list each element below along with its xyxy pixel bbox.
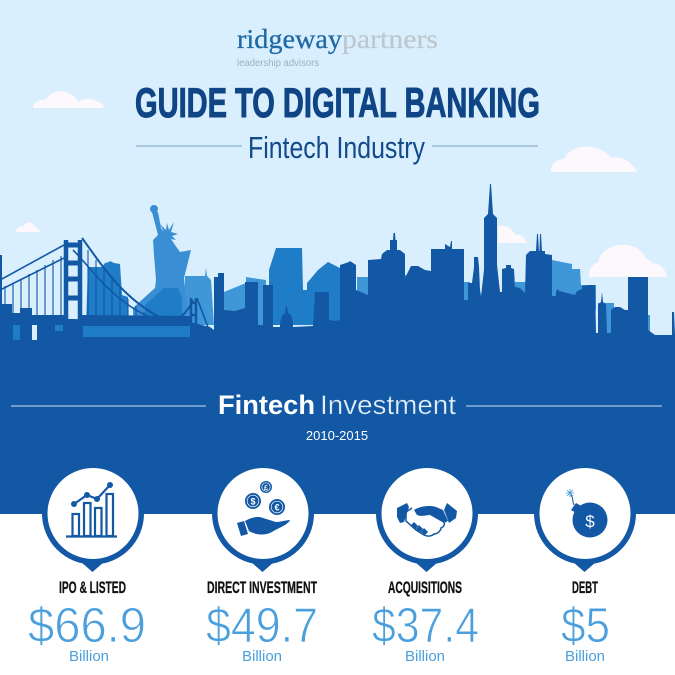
value: $5 [561,599,610,653]
value: $66.9 [28,599,146,653]
marker pin with bomb icon: $ [585,512,595,531]
blue band [0,340,675,514]
marker pin with coins and hand icon: £ [264,485,268,492]
marker pin with handshake icon [376,462,478,572]
header: logo: ridgeway [237,24,343,54]
golden gate bridge [0,238,209,335]
label: ACQUISITIONS [388,579,462,597]
section heading [11,390,662,443]
unit: Billion [405,648,445,665]
marker pin with chart icon [42,462,144,572]
label: DIRECT INVESTMENT [207,579,317,597]
value: $37.4 [372,599,479,653]
marker pin with coins and hand icon: $ [250,496,256,506]
header: logo [237,24,438,69]
label: IPO & LISTED [59,579,126,597]
statue of liberty [133,205,191,325]
section heading: 2010-2015 [306,428,368,443]
header: logo: partners [342,24,438,54]
subtitle: Fintech Industry [248,130,425,165]
clouds [15,91,667,277]
item: Debt [534,462,636,665]
light background buildings [185,260,650,335]
section heading: Investment [320,390,457,420]
sky background [0,0,675,345]
skyline [0,184,675,345]
foreground skyline silhouette [0,184,675,345]
value: $49.7 [206,599,318,653]
mid-blue buildings [86,248,341,325]
unit: Billion [242,648,282,665]
unit: Billion [69,648,109,665]
label: DEBT [572,579,598,597]
marker pin with coins and hand icon [212,462,314,572]
marker pin with bomb icon [534,462,636,572]
item: IPO & Listed [28,462,146,665]
header: logo: leadership advisors [237,57,319,69]
marker pin with coins and hand icon: € [274,502,280,512]
section heading: Fintech [218,390,315,420]
item: Direct Investment [206,462,318,665]
item: Acquisitions [372,462,479,665]
deck-level mid-blue patches [13,325,190,341]
unit: Billion [565,648,605,665]
